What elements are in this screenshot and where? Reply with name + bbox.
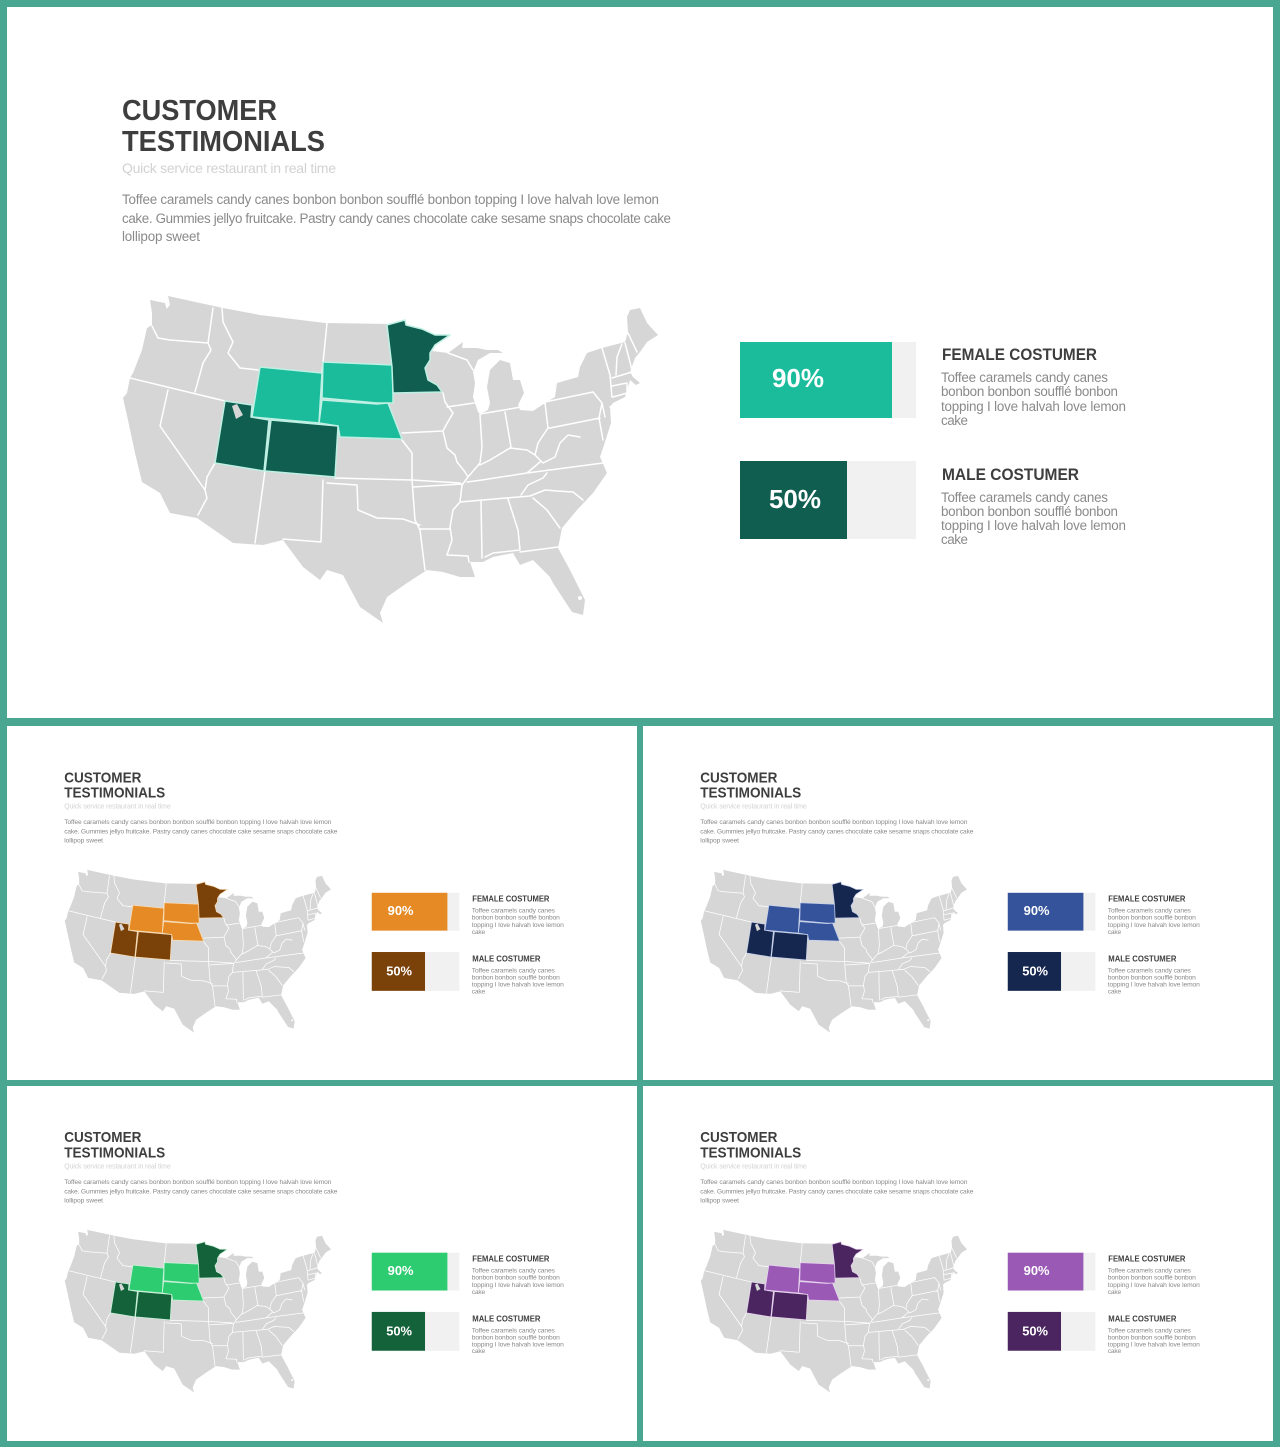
bar: female 90%: 90% [1024, 903, 1050, 918]
text: female costumer [941, 345, 1126, 428]
text: female costumer: bonbon bonbon soufflé bonbon [1108, 915, 1196, 922]
text: male costumer: cake [1108, 1348, 1122, 1355]
text: female costumer: cake [941, 413, 968, 428]
text: male costumer: topping I love halvah love lemon [472, 981, 564, 988]
text: male costumer: bonbon bonbon soufflé bonbon [472, 1334, 560, 1341]
text: female costumer: FEMALE COSTUMER [472, 894, 549, 904]
text: female costumer: bonbon bonbon soufflé bonbon [941, 384, 1118, 399]
bar: male 50% [372, 952, 459, 991]
text: female costumer: cake [472, 929, 486, 936]
text: male costumer: Toffee caramels candy canes [941, 490, 1108, 505]
intro text block: cake. Gummies jellyo fruitcake. Pastry candy canes chocolate cake sesame snaps chocolate cake [122, 211, 671, 226]
title: CUSTOMER [700, 770, 778, 786]
text: male costumer: Toffee caramels candy canes [472, 967, 556, 974]
intro text block: lollipop sweet [700, 838, 739, 845]
text: male costumer: cake [1108, 988, 1122, 995]
text: male costumer: bonbon bonbon soufflé bonbon [941, 504, 1118, 519]
text: male costumer: topping I love halvah love lemon [1108, 1341, 1200, 1348]
panel: orange slide [7, 726, 637, 1080]
panel: purple slide [643, 1086, 1273, 1441]
panel: green slide [7, 1086, 637, 1441]
text: male costumer [472, 953, 564, 995]
text: female costumer: Toffee caramels candy canes [1108, 908, 1192, 915]
intro text block: cake. Gummies jellyo fruitcake. Pastry candy canes chocolate cake sesame snaps chocolate cake [700, 1188, 974, 1195]
text: female costumer: topping I love halvah love lemon [472, 922, 564, 929]
intro text block: lollipop sweet [64, 1197, 103, 1204]
intro text block: Toffee caramels candy canes bonbon bonbon soufflé bonbon topping I love halvah love lemon [64, 1179, 332, 1186]
bar: male 50%: 50% [1022, 963, 1049, 978]
text: female costumer: topping I love halvah love lemon [941, 399, 1126, 414]
text: female costumer: Toffee caramels candy canes [472, 1268, 556, 1275]
bar: female 90%: 90% [772, 363, 824, 393]
map: USA with highlighted states [123, 296, 658, 623]
text: male costumer: bonbon bonbon soufflé bonbon [1108, 1334, 1196, 1341]
intro text block [64, 1179, 338, 1204]
bar: female 90%: 90% [388, 1263, 414, 1278]
title: CUSTOMER [700, 1130, 778, 1146]
title: CUSTOMER [122, 95, 277, 127]
panel: main teal slide [7, 7, 1273, 718]
map: USA with highlighted states [701, 870, 967, 1033]
text: male costumer [941, 465, 1126, 547]
intro text block: Toffee caramels candy canes bonbon bonbon soufflé bonbon topping I love halvah love lemon [700, 1179, 968, 1186]
intro text block: cake. Gummies jellyo fruitcake. Pastry candy canes chocolate cake sesame snaps chocolate cake [64, 829, 338, 836]
map: USA with highlighted states [65, 1230, 331, 1393]
text: male costumer: MALE COSTUMER [942, 465, 1079, 484]
bar: female 90%: 90% [388, 903, 414, 918]
text: male costumer: Toffee caramels candy canes [472, 1327, 556, 1334]
bar: female 90% [1008, 1253, 1095, 1291]
title [700, 1130, 802, 1162]
map: USA with highlighted states [65, 870, 331, 1033]
text: female costumer [1108, 894, 1200, 936]
text: male costumer: topping I love halvah love lemon [472, 1341, 564, 1348]
text: female costumer [472, 1254, 564, 1296]
title: CUSTOMER [64, 1130, 142, 1146]
subtitle: Quick service restaurant in real time [122, 160, 336, 176]
text: female costumer [472, 894, 564, 936]
bar: male 50%: 50% [386, 963, 413, 978]
title: TESTIMONIALS [64, 786, 166, 802]
text: female costumer: Toffee caramels candy canes [472, 908, 556, 915]
title [64, 1130, 166, 1162]
text: male costumer: MALE COSTUMER [1108, 953, 1176, 963]
text: male costumer: cake [941, 532, 968, 547]
bar: male 50% [1008, 952, 1095, 991]
bar: female 90% [372, 893, 459, 931]
text: female costumer: FEMALE COSTUMER [942, 345, 1097, 364]
bar: female 90% [372, 1253, 459, 1291]
bar: male 50%: 50% [769, 484, 821, 514]
bar: male 50%: 50% [1022, 1323, 1049, 1338]
subtitle: Quick service restaurant in real time [64, 1164, 171, 1171]
subtitle: Quick service restaurant in real time [64, 804, 171, 811]
text: female costumer: Toffee caramels candy canes [941, 370, 1108, 385]
text: female costumer: Toffee caramels candy canes [1108, 1268, 1192, 1275]
title [700, 770, 802, 802]
intro text block [700, 1179, 974, 1204]
intro text block: Toffee caramels candy canes bonbon bonbon soufflé bonbon topping I love halvah love lemon [64, 819, 332, 826]
title: TESTIMONIALS [64, 1146, 166, 1162]
intro text block: cake. Gummies jellyo fruitcake. Pastry candy canes chocolate cake sesame snaps chocolate cake [700, 829, 974, 836]
intro text block: lollipop sweet [700, 1197, 739, 1204]
text: female costumer: bonbon bonbon soufflé bonbon [472, 1275, 560, 1282]
text: male costumer: MALE COSTUMER [472, 1313, 540, 1323]
title: TESTIMONIALS [700, 1146, 802, 1162]
text: female costumer: cake [472, 1289, 486, 1296]
text: male costumer: cake [472, 988, 486, 995]
text: female costumer: cake [1108, 1289, 1122, 1296]
text: male costumer: bonbon bonbon soufflé bonbon [472, 974, 560, 981]
bar: male 50% [372, 1312, 459, 1351]
intro text block: lollipop sweet [64, 838, 103, 845]
intro text block [700, 819, 974, 845]
bar: female 90%: 90% [1024, 1263, 1050, 1278]
text: male costumer: bonbon bonbon soufflé bonbon [1108, 974, 1196, 981]
text: female costumer: cake [1108, 929, 1122, 936]
text: female costumer: topping I love halvah love lemon [472, 1282, 564, 1289]
text: male costumer: topping I love halvah love lemon [941, 518, 1126, 533]
title: TESTIMONIALS [122, 126, 325, 158]
bar: male 50%: 50% [386, 1323, 413, 1338]
intro text block: cake. Gummies jellyo fruitcake. Pastry candy canes chocolate cake sesame snaps chocolate cake [64, 1188, 338, 1195]
map: USA with highlighted states [701, 1230, 967, 1393]
text: female costumer: FEMALE COSTUMER [1108, 894, 1185, 904]
text: male costumer: Toffee caramels candy canes [1108, 967, 1192, 974]
text: female costumer: FEMALE COSTUMER [472, 1254, 549, 1264]
intro text block [122, 192, 671, 244]
title: CUSTOMER [64, 770, 142, 786]
title [64, 770, 166, 802]
bar: female 90% [1008, 893, 1095, 931]
intro text block: lollipop sweet [122, 229, 200, 244]
text: male costumer [1108, 953, 1200, 995]
text: female costumer: bonbon bonbon soufflé bonbon [1108, 1275, 1196, 1282]
intro text block [64, 819, 338, 845]
text: male costumer: Toffee caramels candy canes [1108, 1327, 1192, 1334]
text: male costumer: MALE COSTUMER [1108, 1313, 1176, 1323]
text: female costumer: FEMALE COSTUMER [1108, 1254, 1185, 1264]
intro text block: Toffee caramels candy canes bonbon bonbon soufflé bonbon topping I love halvah love lemon [700, 819, 968, 826]
subtitle: Quick service restaurant in real time [700, 1164, 807, 1171]
bar: female 90% [740, 342, 916, 418]
title: TESTIMONIALS [700, 786, 802, 802]
subtitle: Quick service restaurant in real time [700, 804, 807, 811]
text: female costumer [1108, 1254, 1200, 1296]
title [122, 95, 325, 158]
panel: blue slide [643, 726, 1273, 1080]
text: female costumer: topping I love halvah love lemon [1108, 1282, 1200, 1289]
text: male costumer [472, 1313, 564, 1355]
bar: male 50% [740, 461, 916, 539]
text: male costumer [1108, 1313, 1200, 1355]
text: female costumer: bonbon bonbon soufflé bonbon [472, 915, 560, 922]
intro text block: Toffee caramels candy canes bonbon bonbon soufflé bonbon topping I love halvah love lemon [122, 192, 659, 207]
text: male costumer: topping I love halvah love lemon [1108, 981, 1200, 988]
bar: male 50% [1008, 1312, 1095, 1351]
text: male costumer: MALE COSTUMER [472, 953, 540, 963]
text: female costumer: topping I love halvah love lemon [1108, 922, 1200, 929]
text: male costumer: cake [472, 1348, 486, 1355]
